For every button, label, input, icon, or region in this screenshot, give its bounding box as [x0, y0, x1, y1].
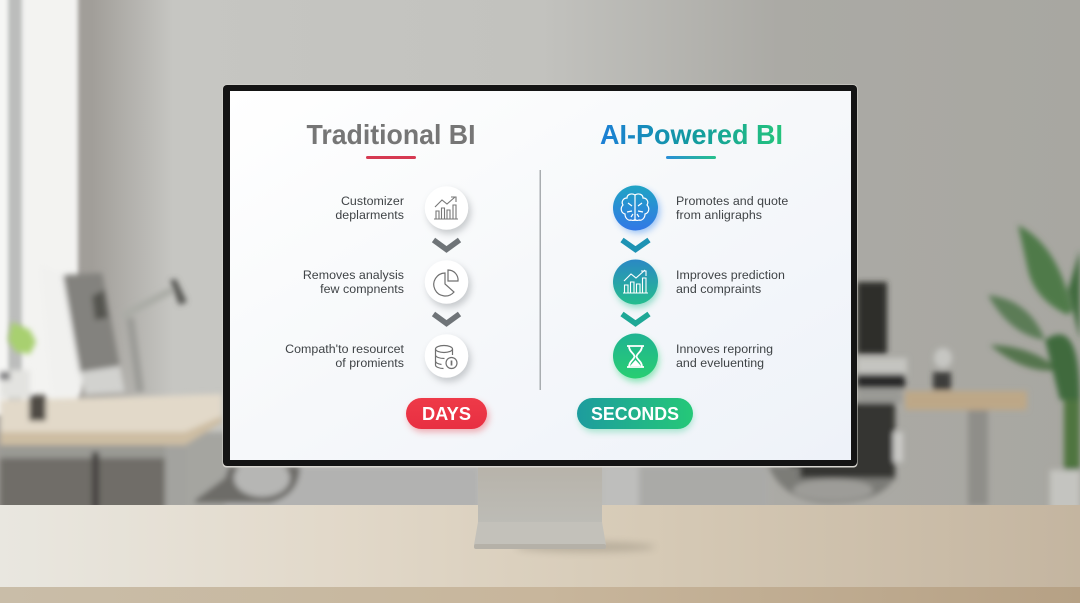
step 3 text: and eveluenting: [676, 356, 764, 370]
wooden table: [0, 505, 1080, 603]
step 2 text: Improves prediction: [676, 268, 785, 282]
step 1 text: deplarments: [335, 208, 404, 222]
step 1 text: [335, 194, 404, 222]
icon: pie chart circle: [425, 260, 471, 308]
step 1 text: [676, 194, 788, 222]
step 3 text: of promients: [335, 356, 404, 370]
icon: bar chart circle: [425, 186, 471, 234]
heading: AI-Powered BI: AI-Powered BI: [600, 119, 783, 150]
heading: Traditional BI: Traditional BI: [306, 119, 476, 150]
step 2 text: [676, 268, 785, 296]
step 2 text: [303, 268, 404, 296]
step 1 text: Customizer: [341, 194, 404, 208]
step 3 text: Innoves reporring: [676, 342, 773, 356]
step 3 text: [676, 342, 773, 370]
step 1 text: Promotes and quote: [676, 194, 788, 208]
arrow: chevron 1: [434, 240, 460, 250]
background: left desk and monitor: [0, 265, 480, 510]
badge: SECONDS: [577, 398, 693, 432]
panel: AI-Powered BI: [577, 119, 788, 432]
step 1 text: from anligraphs: [676, 208, 762, 222]
background: chair, side table, plant: [603, 225, 1080, 510]
badge: SECONDS: SECONDS: [591, 404, 679, 424]
step 2 text: and compraints: [676, 282, 761, 296]
step 2 text: Removes analysis: [303, 268, 404, 282]
badge: DAYS: [406, 398, 489, 432]
arrow: chevron 2: [434, 314, 460, 324]
icon: brain circle: [613, 186, 660, 233]
center divider: [540, 170, 541, 390]
step 3 text: Compath'to resourcet: [285, 342, 405, 356]
icon: growth chart circle: [613, 260, 659, 308]
badge: DAYS: DAYS: [422, 404, 471, 424]
icon: hourglass circle: [613, 334, 659, 382]
arrow: chevron 1: [622, 240, 649, 250]
step 3 text: [285, 342, 405, 370]
panel: Traditional BI: [285, 119, 489, 432]
heading underline gradient: [666, 156, 716, 159]
icon: database circle: [425, 334, 471, 382]
monitor stand: [474, 466, 655, 552]
step 2 text: few compnents: [320, 282, 404, 296]
heading underline red: [366, 156, 416, 159]
monitor bezel: [222, 84, 858, 468]
screen panel: [230, 91, 851, 460]
arrow: chevron 2: [622, 314, 649, 324]
